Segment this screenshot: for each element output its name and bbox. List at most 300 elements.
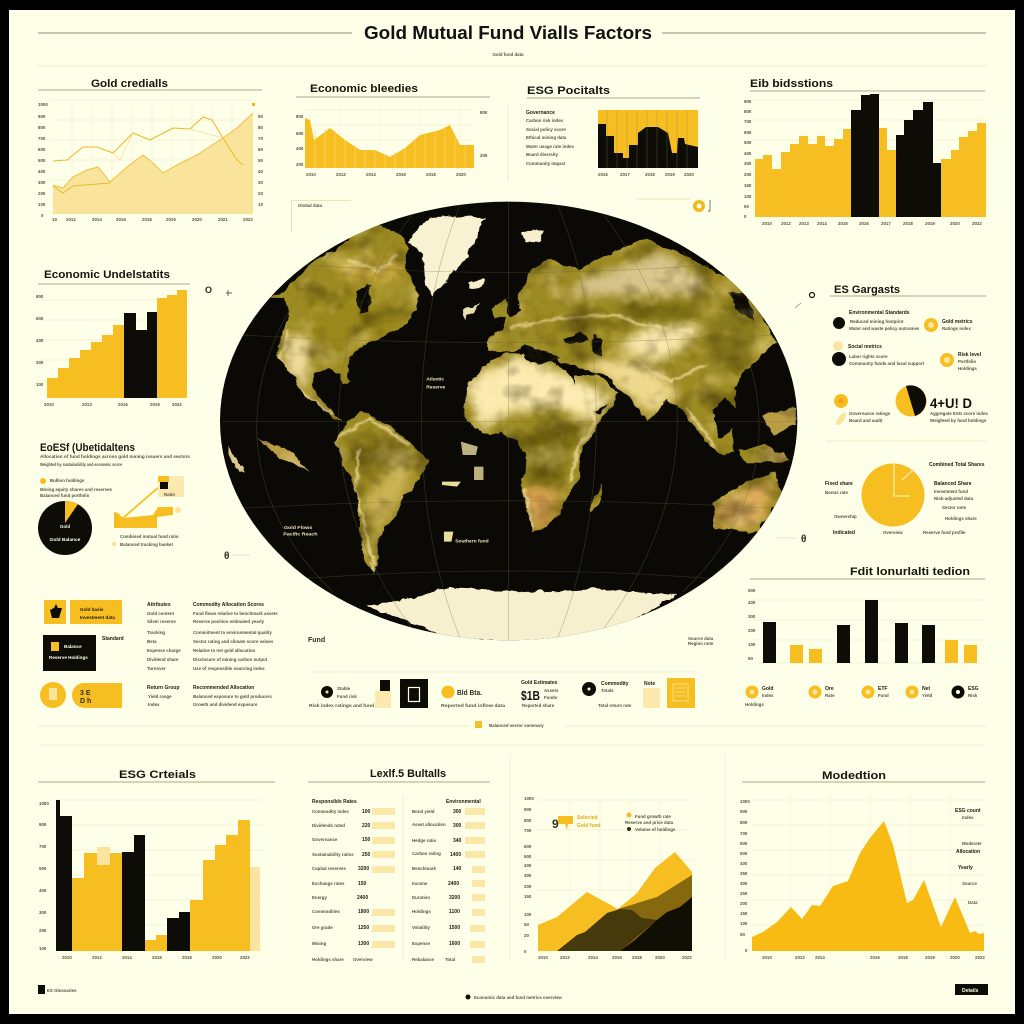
table column two: Disclosure of mining carbon output [193, 657, 268, 662]
panel: fund details table: 100 [362, 809, 371, 815]
panel: fund details table: Overview [353, 957, 373, 962]
panel: moderation area chart: Allocation [956, 849, 980, 855]
panel: ESG fund allocations: Combined mutual fund ratio [120, 534, 179, 539]
panel: gold credentials line chart: 1000 [38, 102, 48, 107]
panel: moderation area chart: 2018 [898, 955, 908, 960]
panel: fund details table: 3200 [358, 866, 369, 872]
panel: ESG goals: Holdings share [945, 516, 977, 521]
panel: layered area chart: 700 [524, 828, 532, 833]
panel: gold credentials line chart: 20 [258, 191, 263, 196]
panel: fund details table: Holdings share [312, 957, 344, 962]
panel: economic indicators bars [36, 269, 190, 407]
panel: fund lower bars: 400 [748, 600, 756, 605]
panel: moderation area chart: 500 [740, 851, 748, 856]
panel: moderation area chart: 100 [740, 921, 748, 926]
callout yellow: Investment data [80, 615, 115, 620]
panel: moderation area chart: 2016 [870, 955, 880, 960]
panel: gold credentials line chart: 2019 [166, 217, 176, 222]
stat: coin: Reported fund inflow data [441, 703, 506, 708]
large pie [862, 464, 924, 526]
small pie [896, 385, 926, 416]
panel: fund lower bars: 100 [748, 642, 756, 647]
table column one: Turnover [147, 666, 166, 671]
panel: ESG bar chart top right: 2010 [762, 221, 772, 226]
panel: ESG fund allocations: Mining equity shares and reserves [40, 487, 113, 492]
heading: moderation: Modedtion [822, 770, 886, 782]
panel: ESG bar chart top right: 100 [744, 194, 752, 199]
stat: black dot: Stable [337, 686, 351, 691]
stat: black circle: Totals [601, 688, 614, 693]
table column two: Recommended Allocation [193, 685, 254, 691]
panel: ESG portraits: Governance [526, 110, 555, 116]
icon: yellow circle [40, 682, 66, 708]
panel: ESG portraits: Carbon risk index [526, 118, 564, 123]
callout text: Gold fund [577, 823, 601, 829]
panel: ESG bar chart top right: 300 [744, 161, 752, 166]
callouts around map: θ [224, 551, 229, 562]
panel: fund details table: Ore grade [312, 925, 333, 930]
stat: black circle: Commodity [601, 681, 629, 687]
stat: coin: Bld Bta. [457, 690, 482, 697]
panel: fund lower bars: 500 [748, 588, 756, 593]
panel: ESG bar chart top right: 2020 [950, 221, 960, 226]
panel: economic trends area chart: 2018 [426, 172, 436, 177]
table column one: Yield range [148, 694, 172, 699]
panel: fund details table [308, 768, 490, 963]
panel: ESG criteria: 2010 [62, 955, 72, 960]
panel: gold credentials line chart: 100 [38, 202, 46, 207]
panel: economic trends area chart: 800 [296, 114, 304, 119]
callout text: Reserve and price data [625, 820, 674, 825]
callout text: Fund growth rate [635, 814, 671, 819]
panel: fund details table: Dividends rated [312, 823, 345, 828]
big stat: 4+U! D [930, 395, 972, 411]
table column two: Commodity Allocation Scores [193, 602, 264, 608]
panel: gold credentials line chart: 2014 [92, 217, 102, 222]
panel: moderation area chart: 800 [740, 820, 748, 825]
heading: economic trends: Economic bleedies [310, 83, 418, 95]
callouts around map: θ [801, 534, 806, 545]
panel: moderation area chart: 2020 [950, 955, 960, 960]
panel: moderation area chart: 700 [740, 831, 748, 836]
panel: ESG goals: Governance ratings [849, 411, 891, 416]
stat: big number: Assets [544, 688, 559, 693]
icon row: Fund [878, 693, 889, 698]
callout pill: D h [80, 698, 91, 705]
panel: ESG goals: Gold metrics [942, 319, 973, 325]
table column two: Commitment to environmental quality [193, 630, 272, 635]
stat: coin [441, 686, 506, 708]
callouts around map: Global data [298, 203, 322, 208]
panel: ESG bar chart top right: 400 [744, 151, 752, 156]
panel: economic trends area chart: 200 [296, 162, 304, 167]
stat tile pale [375, 680, 391, 708]
panel: fund details table: 300 [453, 809, 462, 815]
panel: fund details table: 1100 [449, 909, 460, 915]
panel: ESG criteria: 400 [39, 888, 47, 893]
panel: gold credentials line chart: 2016 [116, 217, 126, 222]
callout yellow: Gold basis [80, 607, 104, 612]
panel: fund details table: Exchange rates [312, 881, 345, 886]
panel: ESG bar chart top right: 2015 [838, 221, 848, 226]
table column two: Sector rating and climate score values [193, 639, 274, 644]
panel: moderation area chart: 900 [740, 809, 748, 814]
table column one [147, 602, 181, 707]
panel: fund details table: 3200 [449, 895, 460, 901]
panel: ESG goals: Community funds and local support [849, 361, 925, 366]
panel: ESG bar chart top right: 900 [744, 99, 752, 104]
stat: big number: Reported share [522, 703, 555, 708]
panel: layered area chart: 20 [524, 933, 529, 938]
panel: gold credentials line chart: 300 [38, 180, 46, 185]
map labels: Pacific Reach [283, 532, 317, 538]
panel: fund details table: 1400 [450, 852, 461, 858]
footer [38, 984, 988, 1000]
pie chart: Gold [60, 524, 70, 529]
panel: layered area chart: 50 [524, 922, 529, 927]
panel: gold credentials line chart: 2018 [142, 217, 152, 222]
panel: economic indicators bars: 600 [36, 316, 44, 321]
panel: gold credentials line chart: 0 [41, 213, 44, 218]
step chart [114, 476, 184, 528]
heading: ESG portraits: ESG Pocitalts [527, 85, 610, 97]
panel: economic indicators bars: 2013 [82, 402, 92, 407]
callout pill: 3 E [80, 690, 91, 697]
panel: moderation area chart: 2014 [815, 955, 825, 960]
panel: moderation area chart: 150 [740, 911, 748, 916]
panel: fund details table: 2400 [448, 881, 459, 887]
panel: fund details table: 150 [362, 837, 371, 843]
panel: fund details table: Asset allocation [412, 822, 446, 827]
panel: fund details table: Hedge ratio [412, 838, 436, 843]
panel: gold credentials line chart: 800 [38, 125, 46, 130]
panel: fund details table: Carbon rating [412, 851, 441, 856]
panel: moderation area chart: Index [962, 815, 974, 820]
panel: gold credentials line chart: 10 [258, 202, 263, 207]
panel: layered area chart: 500 [524, 854, 532, 859]
panel: ESG goals: Overview [883, 530, 903, 535]
panel: moderation area chart [740, 770, 985, 960]
panel: economic indicators bars: 800 [36, 294, 44, 299]
panel: fund legend left: Standard [102, 636, 124, 642]
heading: ESG goals: ES Gargasts [834, 284, 900, 296]
panel: ESG portraits: Ethical mining data [526, 135, 567, 140]
heading: gold credentials: Gold credialls [91, 78, 168, 90]
panel: fund details table: 1800 [358, 909, 369, 915]
panel: fund details table: 140 [453, 866, 462, 872]
panel: ESG goals: Indicated [833, 530, 855, 536]
panel: moderation area chart: 2012 [795, 955, 805, 960]
callout text: Selected [577, 815, 598, 821]
icon row: Index [762, 693, 774, 698]
icon: document [667, 678, 695, 708]
panel: fund details table: Bond yield [412, 809, 435, 814]
panel: ESG goals: Reserve fund profile [923, 530, 966, 535]
panel: ESG bar chart top right: 700 [744, 119, 752, 124]
graticule [222, 202, 796, 642]
callout text: Volume of holdings [635, 827, 676, 832]
icon: yellow tile [44, 600, 66, 624]
panel: gold credentials line chart: 900 [38, 114, 46, 119]
panel: moderation area chart: 350 [740, 871, 748, 876]
panel: economic indicators bars: 300 [36, 360, 44, 365]
panel: ESG goals: Board and audit [849, 418, 883, 423]
table column one: Expense charge [147, 648, 181, 653]
panel: layered area chart: 2016 [612, 955, 622, 960]
table column two: Relative to net gold allocation [193, 648, 256, 653]
panel: ESG criteria: 500 [39, 866, 47, 871]
panel: fund lower bars: 300 [748, 614, 756, 619]
panel: layered area chart: 2010 [538, 955, 548, 960]
callout text [552, 812, 676, 832]
panel: layered area chart: 400 [524, 863, 532, 868]
table column two [193, 602, 278, 707]
panel: layered area chart: 0 [524, 949, 527, 954]
pie chart: Gold Balance [50, 537, 81, 543]
panel: ESG criteria: 2014 [122, 955, 132, 960]
table column one: Gold content [147, 611, 175, 616]
panel: fund details table: 250 [362, 852, 371, 858]
panel: fund details table: Energy [312, 895, 327, 900]
heading: economic indicators: Economic Undelstatits [44, 269, 170, 281]
panel: fund details table: Rebalance [412, 957, 435, 962]
panel: ESG goals: Weighted by fund holdings [930, 418, 987, 423]
divider note [38, 721, 986, 745]
title [38, 23, 986, 66]
panel: moderation area chart: ESG count [955, 808, 981, 814]
panel: ESG portraits: Social policy score [526, 127, 566, 132]
panel: ESG portraits: Community impact [526, 161, 566, 166]
panel: moderation area chart: 400 [740, 861, 748, 866]
panel: ESG bar chart top right: 2018 [903, 221, 913, 226]
map labels: Gold Flows [284, 525, 313, 531]
panel: ESG bar chart top right: 2012 [781, 221, 791, 226]
panel: ESG bar chart top right: 2013 [799, 221, 809, 226]
heading: allocations: EoESf (Ubetidaltens [40, 442, 135, 454]
panel: layered area chart [510, 755, 725, 960]
panel: ESG bar chart top right: 2022 [972, 221, 982, 226]
panel: ESG goals: Ratings index [942, 326, 971, 331]
panel: moderation area chart: 2022 [975, 955, 985, 960]
panel: fund details table: Capital reserves [312, 866, 346, 871]
panel: gold credentials line chart: 500 [38, 158, 46, 163]
panel: fund details table: Commodities [312, 909, 340, 914]
footer: Details [962, 988, 979, 994]
panel: ESG criteria [38, 769, 275, 960]
table column one: Index [148, 702, 160, 707]
dark inland seas [355, 285, 754, 365]
panel: ESG goals: Water and waste policy outcomes [849, 326, 920, 331]
panel: gold credentials line chart: 50 [258, 158, 263, 163]
panel: ESG goals: Risk-adjusted data [934, 496, 974, 501]
strip of key stats [309, 672, 700, 708]
icon row: Ore [825, 686, 834, 692]
table column one: Tracking [147, 630, 165, 635]
footer: ES Glossaries [47, 988, 77, 993]
table column two: Use of responsible sourcing index [193, 666, 265, 671]
panel: ESG criteria: 2018 [182, 955, 192, 960]
panel: ESG goals: Aggregate ESG score index [930, 411, 988, 416]
panel: gold credentials line chart: 60 [258, 147, 263, 152]
panel: layered area chart: 2014 [588, 955, 598, 960]
table column one: Dividend share [147, 657, 179, 662]
panel: economic trends area chart: 400 [296, 146, 304, 151]
callouts around map: Source data [688, 636, 714, 641]
callout black [43, 635, 96, 671]
panel: ESG bar chart top right: 2017 [881, 221, 891, 226]
panel: ESG portraits: 2018 [645, 172, 655, 177]
panel: layered area chart: 2022 [682, 955, 692, 960]
map labels [283, 377, 489, 543]
strip of key stats: Risk index ratings and fund [309, 703, 374, 708]
panel: fund details table: 1300 [358, 941, 369, 947]
panel: ESG goals: Social metrics [848, 344, 882, 350]
divider note: Balanced sector summary [489, 723, 544, 728]
icon row [745, 686, 979, 707]
panel: economic trends area chart: 2012 [336, 172, 346, 177]
panel: ESG goals: Ownership [834, 514, 857, 519]
icon row: Risk [968, 693, 978, 698]
icon row: Gold [762, 686, 773, 692]
icon row: ETF [878, 686, 887, 692]
panel: ESG fund allocations [38, 442, 191, 555]
panel: ESG fund allocations: Balanced fund portfolio [40, 493, 90, 498]
heading: fund indicators: Fdit lonurlalti tedion [850, 566, 970, 578]
panel: economic trends area chart: 2016 [396, 172, 406, 177]
panel: ESG bar chart top right: 2014 [817, 221, 827, 226]
panel: gold credentials line chart: 90 [258, 114, 263, 119]
panel: ESG criteria: 200 [39, 928, 47, 933]
scattered islands and reefs [442, 442, 483, 542]
callouts around map: O [205, 285, 212, 295]
table column two: Growth and dividend exposure [193, 702, 258, 707]
stat: big number [521, 680, 559, 708]
panel: gold credentials line chart: 2022 [243, 217, 253, 222]
panel: ESG criteria: 300 [39, 910, 47, 915]
panel: economic indicators bars: 2016 [118, 402, 128, 407]
panel: ESG portraits: 2019 [665, 172, 675, 177]
panel: moderation area chart: Source [962, 881, 977, 886]
panel: fund details table: 1500 [449, 925, 460, 931]
panel: fund lower bars [745, 566, 985, 707]
panel: layered area chart: 2018 [632, 955, 642, 960]
panel: ESG goals: Labor rights score [849, 354, 888, 359]
panel: ESG criteria: 1000 [39, 801, 49, 806]
panel: ESG criteria: 2016 [152, 955, 162, 960]
panel: fund details table: 1600 [449, 941, 460, 947]
stat: black circle [582, 681, 632, 708]
panel: gold credentials line chart: 400 [38, 169, 46, 174]
panel: economic indicators bars: 2019 [150, 402, 160, 407]
panel: moderation area chart: Moderate [962, 841, 982, 846]
panel: fund details table: Holdings [412, 909, 431, 914]
panel: ESG bar chart top right: 200 [744, 172, 752, 177]
panel: ESG portraits: 2017 [620, 172, 630, 177]
panel: fund details table: 340 [453, 838, 462, 844]
panel: moderation area chart: Yearly [958, 865, 973, 871]
panel: ESG goals: Reduced mining footprint [850, 319, 904, 324]
panel: gold credentials line chart: 10 [52, 217, 57, 222]
panel: moderation area chart: 1000 [740, 799, 750, 804]
panel: moderation area chart: 600 [740, 841, 748, 846]
panel: economic indicators bars: 2010 [44, 402, 54, 407]
title: Gold Mutual Fund Vialls Factors [364, 23, 652, 43]
panel: moderation area chart: 2019 [925, 955, 935, 960]
panel: layered area chart: 150 [524, 894, 532, 899]
panel: ESG goals: Risk level [958, 352, 982, 358]
step chart: Ratio [164, 492, 175, 497]
table column two: Fund flows relative to benchmark assets [193, 611, 278, 616]
table column one: Return Group [147, 685, 180, 691]
panel: ESG goals: Sector note [942, 505, 967, 510]
callouts around map [205, 199, 814, 646]
panel: ESG bar chart top right: 0 [744, 214, 747, 219]
panel: fund lower bars: 200 [748, 628, 756, 633]
panel: ESG bar chart top right: 800 [744, 109, 752, 114]
panel: gold credentials line chart: 80 [258, 125, 263, 130]
panel: ESG bar chart top right: 2016 [859, 221, 869, 226]
table column one: Attributes [147, 602, 171, 608]
panel: ESG criteria: 2012 [92, 955, 102, 960]
stat: black dot: Fund risk [337, 694, 357, 699]
panel: fund details table: Sustainability ratios [312, 852, 354, 857]
panel: fund details table: Governance [312, 837, 338, 842]
world map globe [216, 195, 803, 648]
panel: gold credentials line chart: 70 [258, 136, 263, 141]
icon row: Holdings [745, 702, 764, 707]
panel: layered area chart: 200 [524, 884, 532, 889]
panel: layered area chart: 100 [524, 912, 532, 917]
stat: big number: $1B [521, 688, 540, 703]
panel: gold credentials line chart: 2021 [218, 217, 228, 222]
panel: fund details table: 150 [358, 881, 367, 887]
panel: moderation area chart: Data [968, 900, 978, 905]
panel: ESG criteria: 100 [39, 946, 47, 951]
panel: economic trends area chart: 2014 [366, 172, 376, 177]
panel: economic indicators bars: 2022 [172, 402, 182, 407]
panel: fund legend left [40, 600, 278, 708]
panel: ESG portraits: Board diversity [526, 152, 559, 157]
panel: gold credentials line chart: 600 [38, 147, 46, 152]
stat: black dot [321, 686, 357, 699]
stat: big number: Gold Estimates [521, 680, 558, 686]
panel: ESG bar chart top right: 50 [744, 204, 749, 209]
panel: ESG goals: Holdings [958, 366, 977, 371]
panel: ESG fund allocations: Balanced tracking basket [120, 542, 173, 547]
stat: black circle: Total return rate [598, 703, 632, 708]
panel: moderation area chart: 2010 [762, 955, 772, 960]
panel: ESG criteria: 900 [39, 822, 47, 827]
panel: economic indicators bars: 400 [36, 338, 44, 343]
panel: gold credentials line chart [38, 78, 263, 222]
panel: fund details table: Mining [312, 941, 326, 946]
panel: ESG portraits [526, 85, 700, 177]
panel: ESG portraits: 2016 [598, 172, 608, 177]
callout text: 9 [552, 817, 559, 831]
panel: gold credentials line chart: 700 [38, 136, 46, 141]
panel: economic trends area chart: 2010 [306, 172, 316, 177]
panel: fund lower bars: 50 [748, 656, 753, 661]
panel: economic indicators bars: 100 [36, 382, 44, 387]
panel: gold credentials line chart: 200 [38, 191, 46, 196]
panel: ESG bar chart top right: 600 [744, 130, 752, 135]
callout black: Balance [64, 644, 82, 649]
panel: ESG goals: Fixed share [825, 481, 853, 487]
panel: moderation area chart: 300 [740, 881, 748, 886]
callout yellow [70, 600, 122, 624]
panel: fund details table: Commodity index [312, 809, 349, 814]
panel: ESG fund allocations: Bullion holdings [50, 478, 85, 483]
